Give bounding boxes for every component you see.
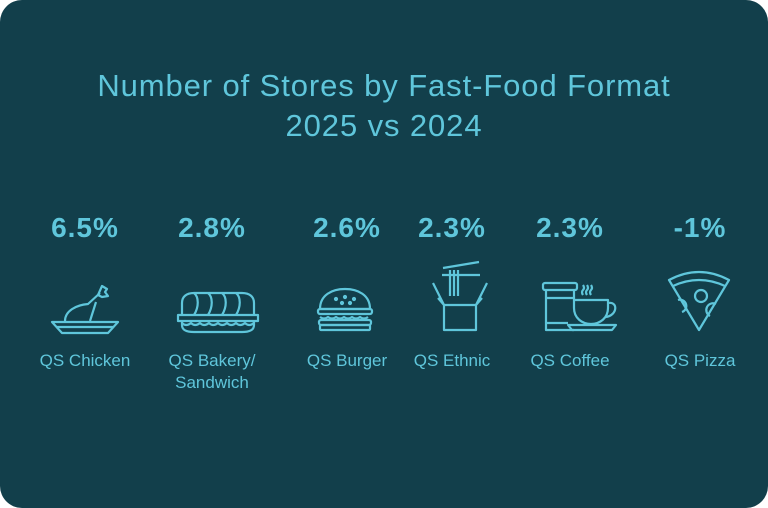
label: QS Ethnic	[414, 351, 490, 370]
icon: pizza	[668, 270, 730, 332]
column: ethnic: 2.3%	[418, 212, 486, 243]
label: QS Chicken	[40, 351, 130, 370]
label: QS Pizza	[665, 351, 735, 370]
icon: burger	[316, 288, 374, 332]
label	[169, 351, 256, 392]
column: chicken: 6.5%	[51, 212, 119, 243]
column: chicken	[40, 212, 130, 370]
column: burger	[307, 212, 387, 370]
column: bakery: 2.8%	[178, 212, 246, 243]
column: bakery	[169, 212, 260, 392]
column: burger: 2.6%	[313, 212, 381, 243]
column: coffee	[530, 212, 618, 370]
icon: sandwich	[176, 292, 260, 334]
icon: chicken	[50, 284, 120, 334]
title: Number of Stores by Fast-Food Format	[97, 68, 671, 103]
label: QS Coffee	[530, 351, 610, 370]
label: Sandwich	[175, 373, 249, 392]
icon: coffee	[542, 282, 618, 332]
title	[97, 68, 671, 143]
column: pizza: -1%	[674, 212, 726, 243]
label: QS Burger	[307, 351, 387, 370]
column: coffee: 2.3%	[536, 212, 604, 243]
column: pizza	[665, 212, 736, 370]
column: ethnic	[414, 212, 490, 370]
title: 2025 vs 2024	[286, 108, 482, 143]
icon: noodle box	[432, 260, 488, 332]
label: QS Bakery/	[169, 351, 255, 370]
